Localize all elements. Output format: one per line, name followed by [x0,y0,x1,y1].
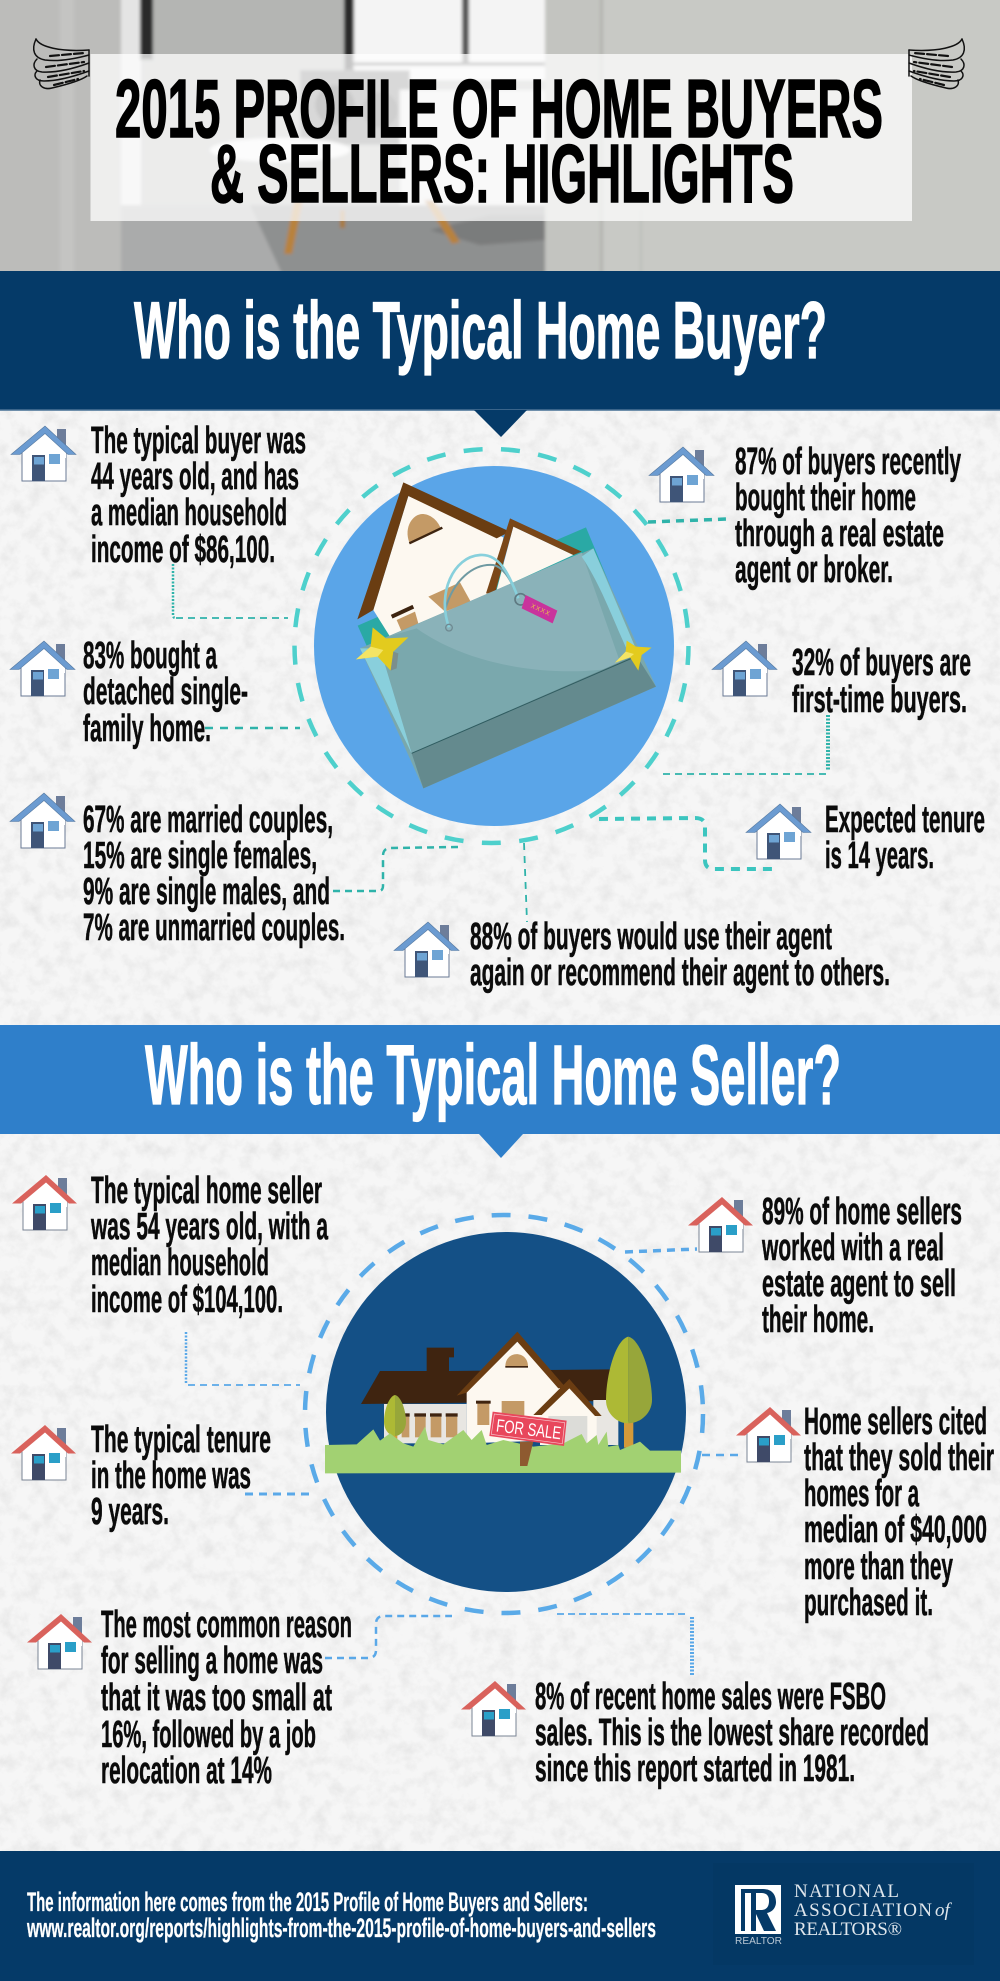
buyer fact: age and income: income of $86,100. [91,529,275,571]
logo: National Association of Realtors: NATIONAL [794,1881,899,1902]
icon: left wing [34,39,89,89]
buyer fact: household types [10,793,345,949]
seller fact: age and income [12,1170,328,1321]
seller fact: reason for selling: The most common reason [101,1604,352,1646]
logo: National Association of Realtors: ASSOCIATION [794,1900,932,1921]
seller fact: age and income: income of $104,100. [91,1279,283,1321]
seller fact: age and income: The typical home seller [91,1170,322,1212]
buyer fact: household types: 7% are unmarried couples. [83,907,345,949]
seller fact: typical tenure: in the home was [91,1455,251,1497]
buyer illustration: circle with shopping bag and house: XXXX [530,603,552,618]
seller fact: reason for selling: 16%, followed by a job [101,1714,316,1756]
buyer fact: detached home: detached single- [83,671,248,713]
seller illustration: circle with house and for sale sign: FOR SALE [495,1415,562,1443]
buyer fact: recommend agent [394,916,890,994]
seller fact: typical tenure [11,1419,271,1533]
footer band [0,1851,1000,1981]
buyer fact: detached home: family home. [83,708,211,750]
seller fact: age and income: was 54 years old, with a [90,1206,328,1248]
buyer fact: detached home: 83% bought a [83,635,217,677]
seller fact: reason for selling: that it was too small at [101,1677,332,1719]
buyer section heading band [0,271,1000,437]
buyer fact: household types: 15% are single females, [83,835,317,877]
buyer fact: expected tenure [746,799,985,877]
seller fact: worked with agent [688,1191,962,1341]
logo: National Association of Realtors: of [935,1900,952,1921]
logo: National Association of Realtors: REALTOR [735,1936,782,1947]
seller fact: typical tenure: 9 years. [91,1491,169,1533]
buyer illustration: circle with shopping bag and house [294,449,688,843]
buyer fact: household types: 67% are married couples, [83,799,333,841]
seller section heading band [0,1025,1000,1158]
header photo [0,0,1000,280]
seller fact: reason for selling [27,1604,352,1792]
buyer fact: age and income: a median household [91,492,287,534]
logo: National Association of Realtors: REALTORS® [794,1919,902,1940]
seller fact: reason for selling: for selling a home was [101,1640,323,1682]
buyer fact: detached home [10,635,248,750]
buyer fact: age and income: 44 years old, and has [91,456,299,498]
buyer fact: first-time buyers [712,641,971,721]
seller fact: worked with agent: their home. [762,1299,874,1341]
title panel [90,54,912,221]
seller fact: sale price gain [736,1401,994,1624]
seller fact: FSBO share [461,1676,929,1790]
seller fact: reason for selling: relocation at 14% [101,1750,272,1792]
logo: National Association of Realtors [735,1881,952,1947]
buyer fact: age and income: The typical buyer was [91,420,306,462]
buyer connectors [173,519,828,922]
buyer fact: age and income [11,420,306,571]
buyer fact: real estate agent [649,441,961,591]
seller illustration: circle with house and for sale sign [305,1215,703,1613]
buyer fact: household types: 9% are single males, and [83,871,330,913]
seller connectors [186,1249,742,1675]
icon: right wing [909,39,964,89]
seller fact: typical tenure: The typical tenure [91,1419,271,1461]
seller fact: age and income: median household [91,1242,269,1284]
